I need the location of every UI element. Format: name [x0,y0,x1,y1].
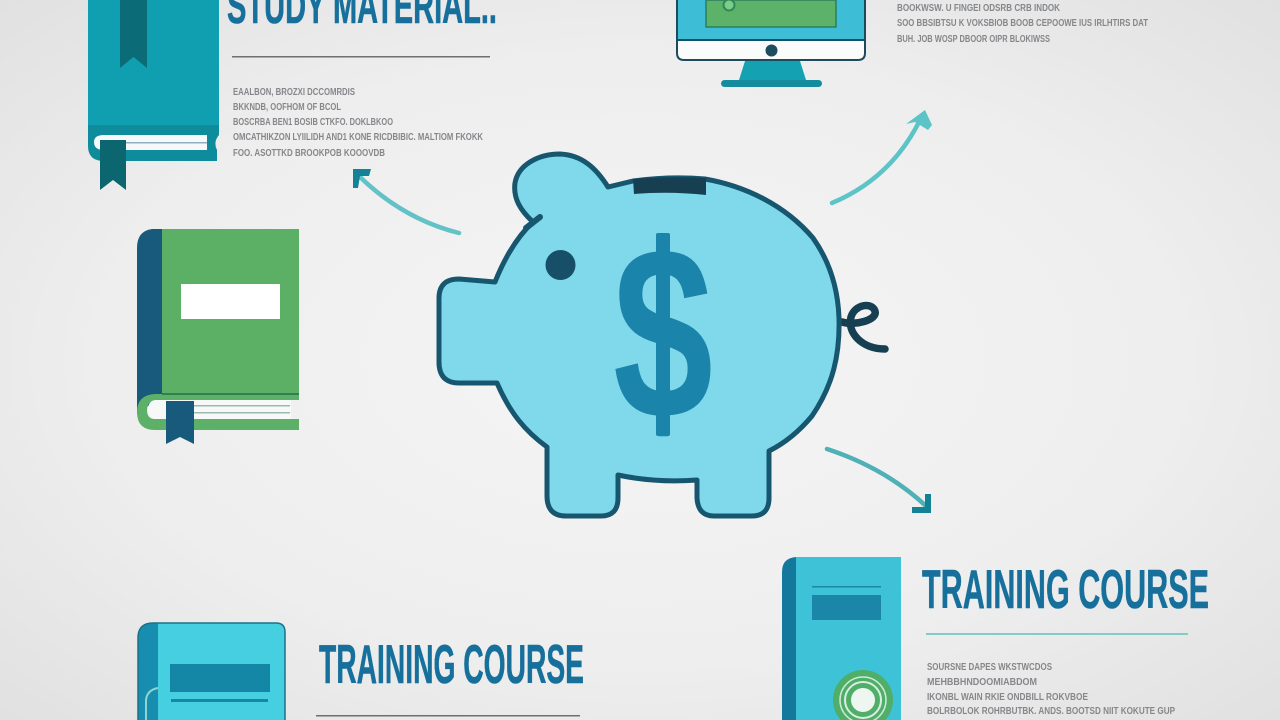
text block: monitor description: SOO BBSIBTSU K VOKSBIOB BOOB CEPOOWE IUS IRLHTIRS DAT [897,18,1148,29]
icon: green book [137,229,299,444]
text block: study material description: FOO. ASOTTKD BROOKPOB KOOOVDB [233,148,385,159]
icon: cyan book [138,623,285,720]
text block: training course right description: BOLRBOLOK ROHRBUTBK. ANDS. BOOTSD NIIT KOKUTE GUP [927,706,1175,717]
text block: study material description: OMCATHIKZON LYIILIDH AND1 KONE RICDBIBIC. MALTIOM FKOKK [233,132,484,143]
text block: study material description: BKKNDB, OOFHOM OF BCOL [233,102,341,113]
icon: desktop monitor [677,0,865,87]
text block: monitor description: BOOKWSW. U FINGEI ODSRB CRB INDOK [897,3,1061,14]
coin slot [633,177,706,195]
text block: training course right description [927,662,1175,717]
text block: study material description: EAALBON, BROZXI DCCOMRDIS [233,87,355,98]
text block: training course right description: IKONBL WAIN RKIE ONDBILL ROKVBOE [927,692,1088,703]
heading: training course left: TRAINING COURSE [319,633,584,695]
arrow: pig to study material [353,169,459,233]
pig tail [842,305,885,349]
icon: blue book with rings [782,557,901,720]
text block: study material description: BOSCRBA BEN1 BOSIB CTKFO. DOKLBKOO [233,117,393,128]
arrow: pig to monitor [832,110,932,203]
text block: training course right description: MEHBBHNDOOMIABDOM [927,677,1037,688]
panel: bottom-left training course [138,623,584,720]
icon: teal book [88,0,219,190]
pig eye [546,250,576,280]
arrow: pig to training course [827,449,931,513]
pig body [439,154,839,516]
text block: monitor description [897,3,1148,45]
text block: training course right description: SOURSNE DAPES WKSTWCDOS [927,662,1052,673]
panel: top-left study material [88,0,497,190]
ear crease [526,217,540,228]
panel: bottom-right training course [782,557,1209,720]
text block: monitor description: BUH. JOB WOSP DBOOR OIPR BLOKIWSS [897,34,1050,45]
panel: top-right monitor [677,0,1148,87]
text block: study material description [233,87,484,159]
icon: piggy bank with dollar sign [439,154,885,516]
dollar sign: $ [613,196,713,471]
